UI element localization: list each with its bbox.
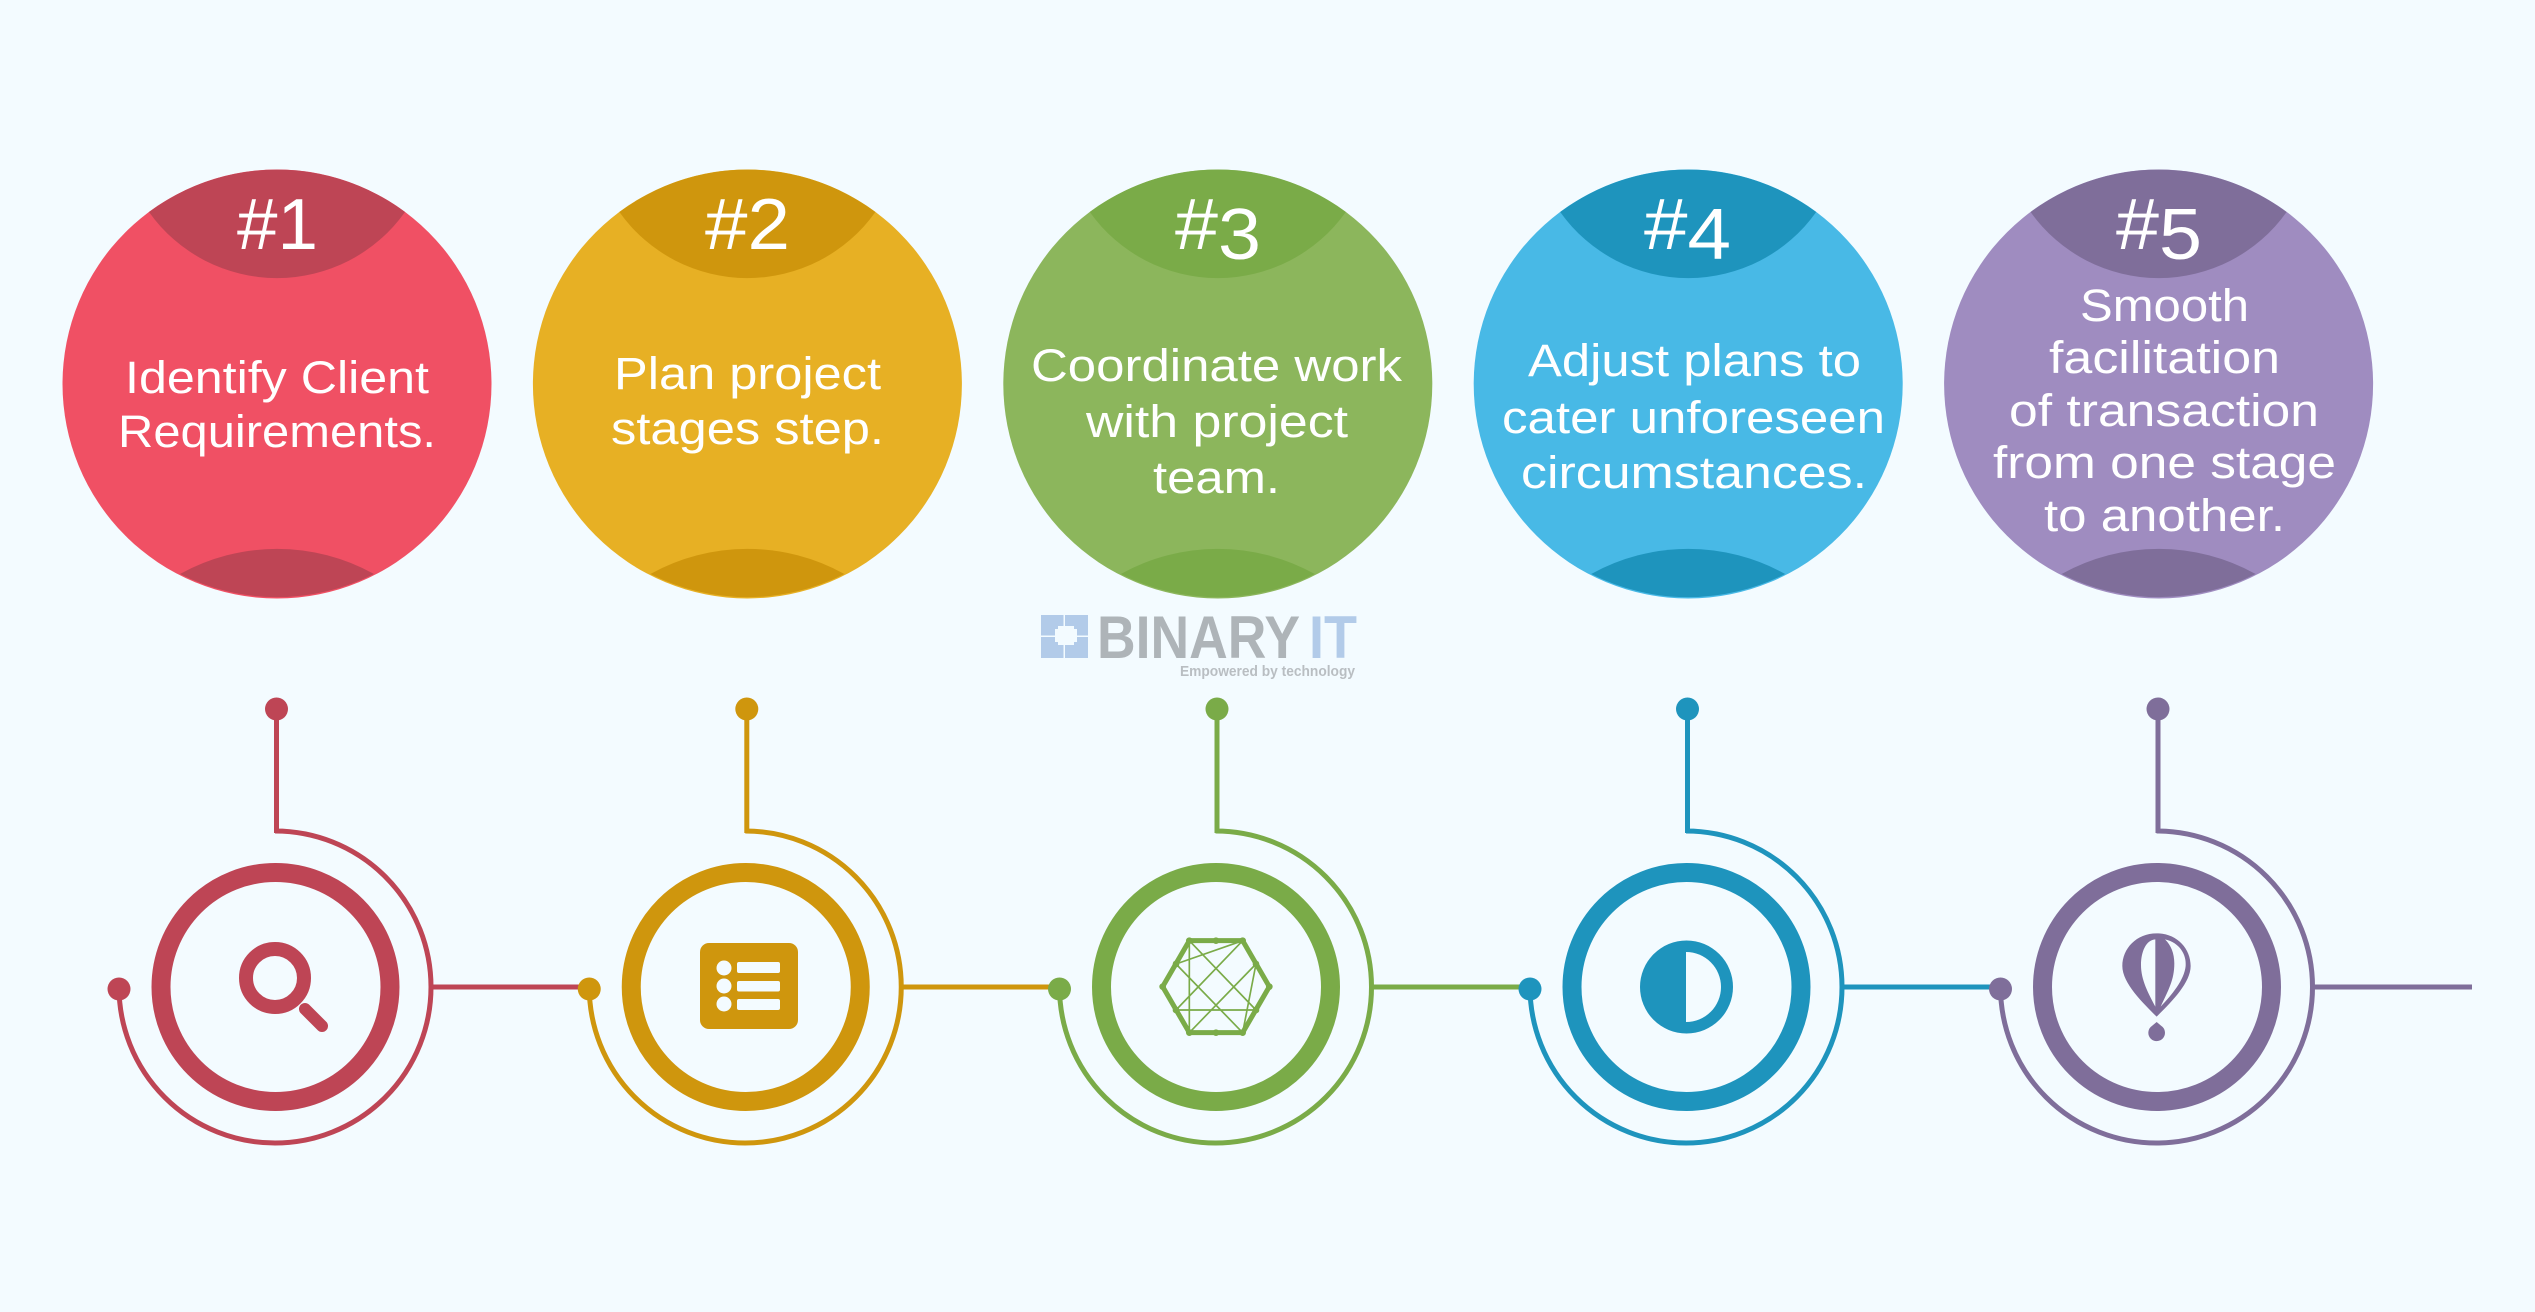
logo mark [1041, 615, 1088, 658]
step 1 description: Requirements. [118, 406, 436, 457]
thick ring [1102, 872, 1330, 1102]
tagline: Empowered by technology [1180, 663, 1356, 680]
step 5 description: of transaction [2009, 385, 2319, 436]
number #3: # [1175, 185, 1215, 265]
connector line and arc [589, 709, 1060, 1143]
left dot [1048, 978, 1071, 1000]
number #1: #1 [237, 185, 318, 265]
left dot [1989, 978, 2012, 1000]
purple disc with caps [1944, 170, 2373, 598]
timeline node 3 [1048, 698, 1530, 1143]
panel: step 5 circle [1944, 170, 2373, 598]
step 3 description: team. [1153, 452, 1280, 503]
blue disc with caps [1474, 170, 1903, 598]
thick ring [2042, 872, 2272, 1102]
yellow disc with caps [533, 170, 962, 598]
left dot [108, 978, 130, 1000]
step 3 description: Coordinate work [1031, 340, 1403, 391]
number #4: # [1644, 185, 1684, 265]
thick ring [631, 872, 860, 1102]
icon: half circle [1640, 940, 1733, 1034]
wordmark IT: IT [1309, 604, 1357, 671]
step 4 description: cater unforeseen [1502, 392, 1885, 443]
step 4 description: Adjust plans to [1528, 335, 1861, 386]
step 2 description: stages step. [611, 403, 884, 454]
timeline node 1 [108, 698, 590, 1143]
number #5: # [2116, 185, 2156, 265]
panel: step 1 circle [62, 170, 492, 598]
step 2 description: Plan project [614, 348, 882, 399]
timeline node 4 [1518, 698, 2000, 1143]
step 3 description: with project [1085, 396, 1349, 447]
number #3: 3 [1218, 195, 1261, 275]
step 1 description [118, 352, 436, 457]
thick ring [1572, 872, 1801, 1102]
connector line and arc [1530, 709, 2000, 1143]
step 3 description [1031, 340, 1403, 503]
red disc with caps [62, 170, 492, 598]
logo: Binary IT [1041, 604, 1357, 680]
number #5: 5 [2159, 195, 2202, 275]
icon: checklist [700, 943, 798, 1029]
step 2 description [611, 348, 884, 454]
top dot [265, 698, 288, 720]
number #4: 4 [1688, 195, 1731, 275]
panel: step 4 circle [1474, 170, 1903, 598]
green disc with caps [1003, 170, 1432, 598]
left dot [578, 978, 601, 1000]
top dot [1676, 698, 1699, 720]
step 5 description [1993, 280, 2336, 541]
connector line and arc [2000, 709, 2472, 1143]
left dot [1518, 978, 1542, 1000]
step 5 description: Smooth [2080, 280, 2249, 331]
top dot [2146, 698, 2170, 720]
timeline node 2 [578, 698, 1060, 1143]
connector line and arc [119, 709, 590, 1143]
connector line and arc [1060, 709, 1530, 1143]
step 1 description: Identify Client [125, 352, 430, 403]
timeline node 5 [1989, 698, 2472, 1143]
step 5 description: to another. [2044, 490, 2285, 541]
number #2: #2 [705, 185, 790, 265]
thick ring [161, 872, 390, 1102]
step 5 description: facilitation [2049, 332, 2280, 383]
top dot [1206, 698, 1228, 720]
panel: step 2 circle [533, 170, 962, 598]
icon: hot air balloon [2122, 933, 2191, 1041]
step 5 description: from one stage [1993, 437, 2336, 488]
top dot [735, 698, 758, 720]
step 4 description: circumstances. [1521, 447, 1867, 498]
icon: connected hexagon [1159, 937, 1273, 1036]
wordmark BINARY: BINARY [1097, 604, 1300, 671]
icon: magnifying glass [246, 949, 322, 1026]
panel: step 3 circle [1003, 170, 1432, 598]
step 4 description [1502, 335, 1885, 498]
